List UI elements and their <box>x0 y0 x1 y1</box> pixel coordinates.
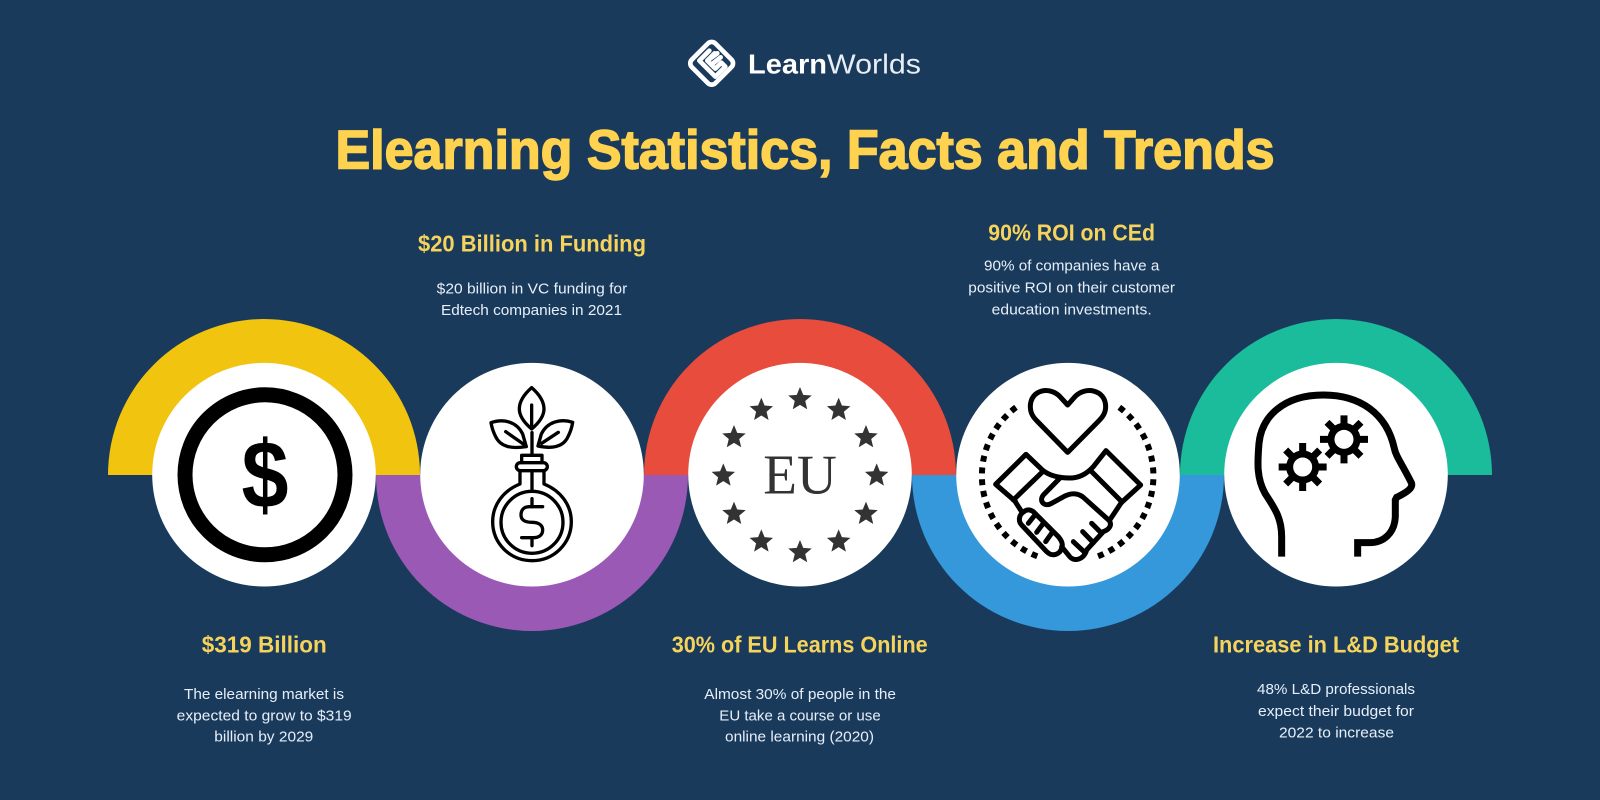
block: 30% of EU Learns Online: online learning (2020) <box>725 729 874 746</box>
circle: budget <box>1224 363 1448 586</box>
icon: handshake with heart <box>982 391 1153 559</box>
stars <box>712 387 888 562</box>
block: 30% of EU Learns Online: EU take a course or use <box>719 708 881 725</box>
block: 30% of EU Learns Online <box>672 631 928 746</box>
block: Increase in L&D Budget: expect their budget for <box>1258 703 1414 720</box>
block: 90% ROI on CEd: positive ROI on their customer <box>968 280 1175 297</box>
block: $319 Billion: expected to grow to $319 <box>177 708 352 725</box>
arc: red <box>644 319 956 475</box>
gear: upper <box>1320 415 1368 463</box>
block: $319 Billion: The elearning market is <box>184 686 344 703</box>
block: 30% of EU Learns Online: Almost 30% of people in the <box>704 686 896 703</box>
block: 90% ROI on CEd: education investments. <box>992 301 1152 318</box>
logo: LearnWorlds: Worlds <box>827 48 921 80</box>
icon: head with gears <box>1258 395 1412 557</box>
block: $319 Billion <box>177 631 352 746</box>
EU letters: EU <box>763 444 837 506</box>
block: $20 Billion in Funding <box>418 231 646 319</box>
icon: dollar coin: $ <box>242 422 288 528</box>
block: $20 Billion in Funding: Edtech companies in 2021 <box>441 302 622 319</box>
icon: LearnWorlds diamond mark <box>688 40 735 87</box>
wordmark: Learn <box>748 48 827 80</box>
logo: LearnWorlds <box>688 40 921 87</box>
icon: EU stars and letters <box>712 387 888 562</box>
block: $319 Billion: billion by 2029 <box>214 729 313 746</box>
block: $20 Billion in Funding: $20 Billion in Funding <box>418 231 646 257</box>
block: 90% ROI on CEd <box>968 220 1175 318</box>
block: Increase in L&D Budget: Increase in L&D Budget <box>1213 631 1459 657</box>
block: Increase in L&D Budget: 48% L&D professionals <box>1257 681 1415 698</box>
block: $20 Billion in Funding: $20 billion in VC funding for <box>437 280 627 297</box>
arc: green <box>1180 319 1492 475</box>
arc: yellow <box>108 319 420 475</box>
arc: purple <box>376 475 688 631</box>
circle: EU <box>688 363 912 586</box>
block: $319 Billion: $319 Billion <box>202 631 327 657</box>
title: Elearning Statistics, Facts and Trends <box>336 118 1274 180</box>
block: Increase in L&D Budget <box>1213 631 1459 742</box>
circle: ROI <box>956 363 1180 586</box>
arc: blue <box>912 475 1224 631</box>
block: 90% ROI on CEd: 90% of companies have a <box>984 258 1160 275</box>
gear: lower <box>1279 443 1327 491</box>
circle: funding <box>420 363 644 586</box>
block: Increase in L&D Budget: 2022 to increase <box>1279 724 1394 742</box>
block: 30% of EU Learns Online: 30% of EU Learns Online <box>672 631 928 657</box>
icon: dollar coin <box>185 395 345 555</box>
circle: market <box>152 363 376 586</box>
icon: plant growing from money flask <box>491 388 573 561</box>
block: 90% ROI on CEd: 90% ROI on CEd <box>988 220 1155 246</box>
